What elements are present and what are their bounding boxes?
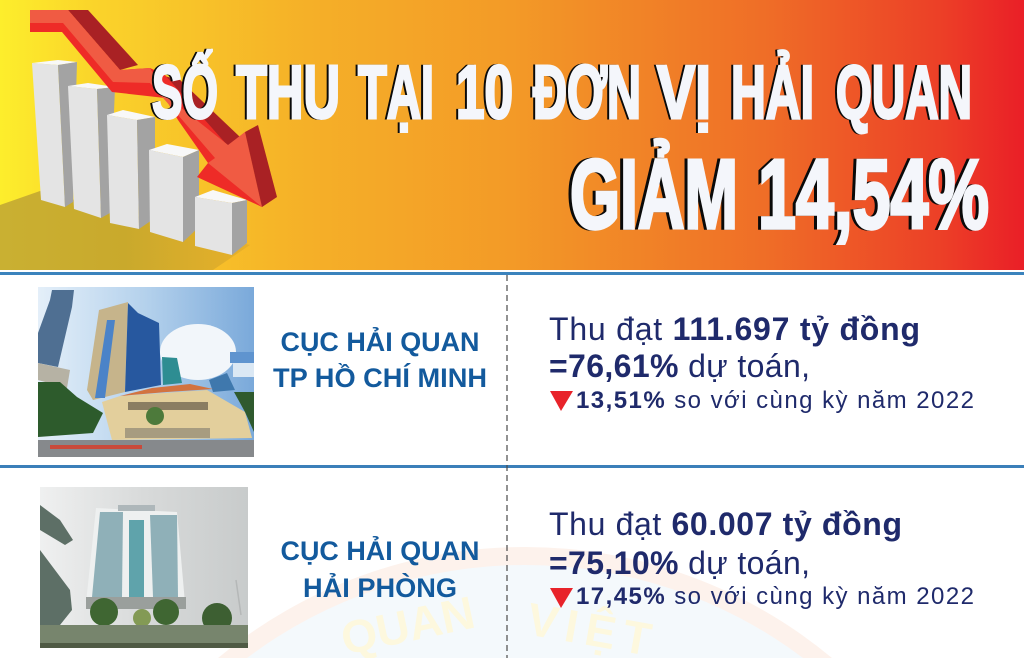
text: Hai Phong figures — [549, 506, 974, 610]
chart bars — [32, 60, 247, 255]
title line 1: SỐ — [150, 50, 216, 134]
title line 1: VỊ — [657, 50, 711, 134]
icon: falling bar chart with red arrow — [0, 10, 277, 270]
title line 1: THU — [234, 50, 338, 134]
title line 1: THU — [236, 50, 340, 134]
title line 1: SỐ — [152, 50, 218, 134]
photo: old building — [102, 390, 252, 440]
text: Hai Phong figures: 17,45% so với cùng kỳ năm 2022 — [576, 583, 974, 610]
title line 2: GIẢM — [570, 139, 738, 249]
text: HCM figures — [549, 311, 974, 414]
photo: Ho Chi Minh customs building — [38, 287, 254, 457]
text: HCM figures: Thu đạt 111.697 tỷ đồng — [549, 311, 920, 347]
title line 2 — [567, 139, 989, 249]
title line 1: TẠI — [358, 50, 434, 134]
title line 2: GIẢM — [567, 139, 735, 249]
photo: Hai Phong customs building — [40, 487, 248, 648]
header banner background — [0, 0, 1024, 270]
chart arrow — [30, 10, 277, 207]
title line 1: 10 — [456, 50, 513, 134]
text: HCM figures: =76,61% dự toán, — [549, 348, 810, 384]
text: Hai Phong figures: Thu đạt 60.007 tỷ đồng — [549, 506, 902, 542]
heading: TP HCM: CỤC HẢI QUAN — [280, 327, 480, 357]
title line 1: HẢI — [729, 50, 812, 134]
heading: Hai Phong: HẢI PHÒNG — [303, 573, 457, 603]
text: HCM figures: 13,51% so với cùng kỳ năm 2022 — [576, 387, 974, 414]
text: Hai Phong figures: =75,10% dự toán, — [549, 545, 810, 581]
title line 1: ĐƠN — [533, 50, 641, 134]
title line 1: VỊ — [655, 50, 709, 134]
title line 1: HẢI — [731, 50, 814, 134]
heading: Hai Phong: CỤC HẢI QUAN — [280, 536, 480, 566]
heading: TP HCM: TP HỒ CHÍ MINH — [273, 363, 487, 393]
icon: red down triangle — [550, 588, 573, 608]
panel: Cục Hải quan Hải Phòng — [40, 487, 974, 648]
chart floor shadow — [0, 191, 250, 270]
title line 1: 10 — [454, 50, 511, 134]
panel: Cục Hải quan TP Hồ Chí Minh — [38, 287, 974, 457]
title line 1: TẠI — [356, 50, 432, 134]
icon: red down triangle — [550, 391, 573, 411]
watermark emblem — [218, 547, 832, 658]
title line 1 — [150, 50, 972, 134]
title line 1: ĐƠN — [531, 50, 639, 134]
